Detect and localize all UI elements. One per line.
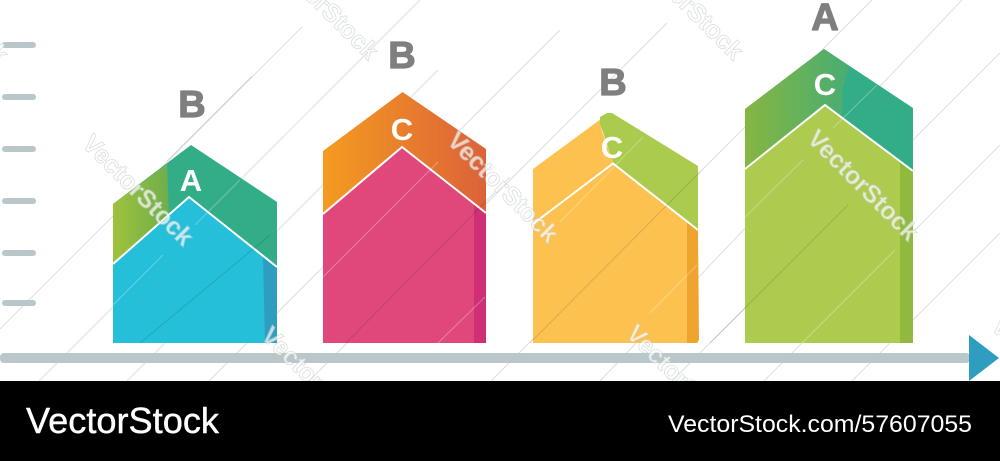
house bar 3: yellow <box>533 113 699 343</box>
black footer band <box>0 381 1000 461</box>
y axis tick marks <box>2 42 36 306</box>
footer brand name: VectorStock <box>26 400 220 441</box>
body: pink <box>323 147 486 343</box>
heading letter: B: B <box>599 62 627 104</box>
body: green <box>745 105 913 343</box>
label: C: C <box>814 67 836 102</box>
house bar 2: pink <box>323 92 486 343</box>
roof: green and teal <box>745 49 913 171</box>
watermarks: VectorStock <box>442 126 564 248</box>
house bar 4: green <box>745 49 913 343</box>
roof: yellow and green <box>533 113 698 230</box>
heading letter: B: B <box>178 84 206 126</box>
watermarks: VectorStock <box>77 129 199 251</box>
house bar 1: blue <box>113 145 277 343</box>
watermarks: VectorStock <box>802 124 924 246</box>
roof: orange <box>323 92 486 214</box>
roof: green <box>113 145 277 267</box>
label: C: C <box>601 130 623 165</box>
label: C: C <box>391 112 413 147</box>
watermarks: VectorStock <box>621 319 743 441</box>
horizontal axis with arrow <box>0 335 999 381</box>
watermarks: VectorStock <box>256 321 378 443</box>
label: A: A <box>180 163 202 198</box>
body: yellow <box>533 164 698 343</box>
heading letter: B: B <box>388 35 416 77</box>
footer image id: VectorStock.com/57607055 <box>668 411 972 438</box>
body: blue <box>113 197 277 343</box>
